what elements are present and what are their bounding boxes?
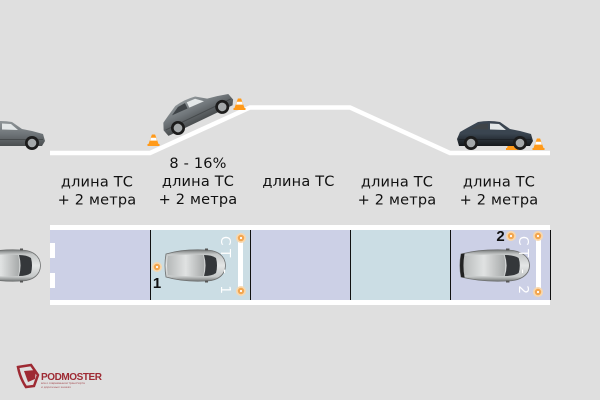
car on the slope, side view bbox=[156, 81, 237, 140]
stop line 1 bbox=[238, 236, 243, 294]
label: section 3: длина ТС bbox=[262, 174, 335, 190]
stop line label 2: СТ - 2 bbox=[515, 236, 531, 294]
label: section 4: + 2 метра bbox=[358, 192, 436, 208]
cone in front of dark car bbox=[532, 138, 544, 150]
logo: podmoster bbox=[18, 365, 103, 389]
car entering from the left, side view bbox=[0, 121, 45, 150]
section labels bbox=[58, 156, 538, 208]
logo: podmoster: все о современном транспорте bbox=[41, 381, 85, 385]
cone at slope top bbox=[234, 98, 246, 110]
cone behind dark car bbox=[506, 138, 518, 150]
logo: podmoster: PODMOSTER bbox=[41, 372, 103, 383]
point number 1: 1 bbox=[153, 275, 161, 292]
label: section 1: длина ТС bbox=[61, 174, 133, 190]
label: section 1: + 2 метра bbox=[58, 192, 136, 208]
label: section 4: длина ТС bbox=[361, 174, 433, 190]
marker cones, section 5 bbox=[506, 231, 543, 297]
car from above, at stop line 1 bbox=[165, 248, 226, 282]
car from above, dark, at stop line 2 bbox=[460, 248, 530, 282]
label: section 5: + 2 метра bbox=[460, 192, 538, 208]
hill profile line bbox=[50, 108, 550, 153]
label: slope percent and section 2: длина ТС bbox=[162, 174, 234, 190]
car after the slope, dark, side view bbox=[457, 121, 533, 150]
point number 2: 2 bbox=[496, 228, 505, 245]
label: slope percent and section 2: 8 - 16% bbox=[169, 156, 227, 172]
stop line 2 bbox=[536, 236, 541, 294]
marker cones, section 2 bbox=[152, 233, 246, 296]
car from above, entering bbox=[0, 248, 40, 282]
label: section 5: длина ТС bbox=[463, 174, 535, 190]
label: slope percent and section 2: + 2 метра bbox=[159, 192, 237, 208]
cone at slope bottom bbox=[148, 134, 160, 146]
logo: podmoster: и дорожных знаках bbox=[41, 385, 71, 389]
stop line label 1: СТ - 1 bbox=[217, 236, 233, 294]
plan view lane bbox=[50, 225, 551, 305]
